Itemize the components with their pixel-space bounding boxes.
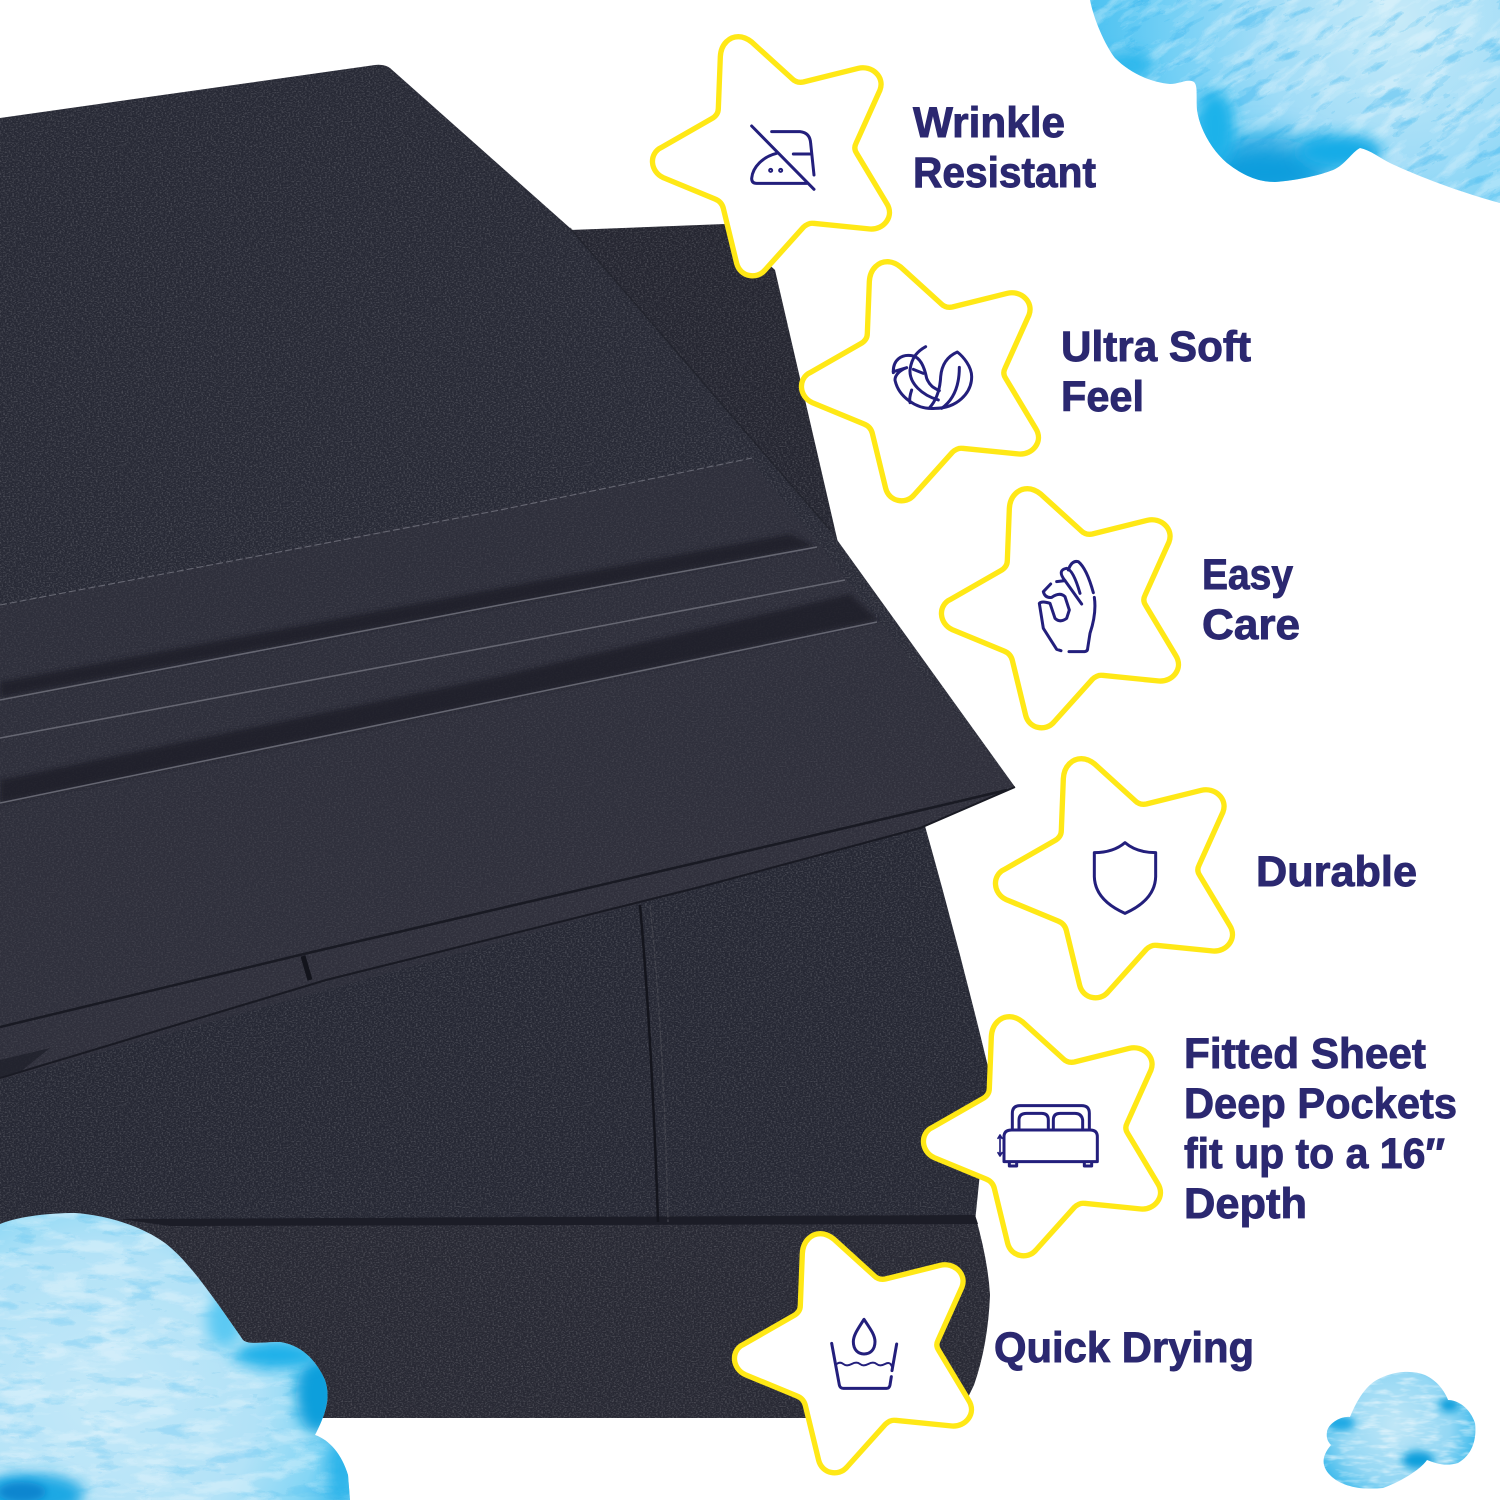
label: fitted sheet deep pockets bbox=[1184, 1030, 1457, 1228]
star: ultra soft bbox=[801, 262, 1038, 501]
label: easy care: Care bbox=[1202, 601, 1300, 649]
star: deep pockets bbox=[923, 1017, 1160, 1256]
star: durable bbox=[995, 759, 1232, 998]
icon: shield bbox=[1094, 843, 1156, 913]
cloud: top right watercolor bbox=[1090, 0, 1500, 203]
label: ultra soft feel: Feel bbox=[1061, 373, 1144, 421]
label: ultra soft feel bbox=[1061, 323, 1251, 421]
star: wrinkle resistant bbox=[652, 37, 889, 276]
label: fitted sheet deep pockets: Depth bbox=[1184, 1180, 1307, 1228]
middle folded sheet bbox=[0, 826, 990, 1224]
label: easy care: Easy bbox=[1202, 551, 1293, 599]
label: wrinkle resistant bbox=[913, 99, 1096, 197]
hem dark pleat bands bbox=[0, 534, 878, 803]
icon: feather and leaf bbox=[893, 347, 972, 408]
star: quick drying bbox=[734, 1234, 971, 1473]
label: wrinkle resistant: Wrinkle bbox=[913, 99, 1065, 147]
folded sheet set photo bbox=[0, 65, 1015, 1418]
pillowcase folded edge bbox=[0, 787, 1015, 1078]
icon: bed with depth arrow bbox=[998, 1106, 1097, 1166]
label: fitted sheet deep pockets: Deep Pockets bbox=[1184, 1080, 1457, 1128]
icon: crossed out iron bbox=[752, 126, 814, 189]
label: fitted sheet deep pockets: Fitted Sheet bbox=[1184, 1030, 1426, 1078]
label: wrinkle resistant: Resistant bbox=[913, 149, 1096, 197]
icon: ok hand bbox=[1039, 561, 1095, 652]
label: easy care bbox=[1202, 551, 1300, 649]
shadow band between sheets bbox=[120, 1215, 978, 1226]
label: ultra soft feel: Ultra Soft bbox=[1061, 323, 1251, 371]
pillowcase edge shadow against back sheet bbox=[570, 228, 830, 530]
cloud: bottom left watercolor bbox=[0, 1200, 360, 1500]
icon: water drop over basin bbox=[832, 1319, 897, 1388]
label: quick drying: Quick Drying bbox=[994, 1324, 1254, 1372]
back flat sheet bbox=[570, 224, 842, 600]
flat sheet fold seam bbox=[640, 905, 668, 1222]
pillowcase bbox=[0, 65, 1015, 1080]
label: fitted sheet deep pockets: fit up to a 16″ bbox=[1184, 1130, 1445, 1178]
cloud: small bottom right bbox=[1324, 1372, 1476, 1489]
pillowcase hem shading bbox=[0, 459, 1015, 1080]
star: easy care bbox=[941, 489, 1178, 728]
bottom folded sheet bbox=[0, 1180, 990, 1418]
hem stitching lines bbox=[0, 458, 877, 803]
label: durable: Durable bbox=[1256, 848, 1417, 896]
